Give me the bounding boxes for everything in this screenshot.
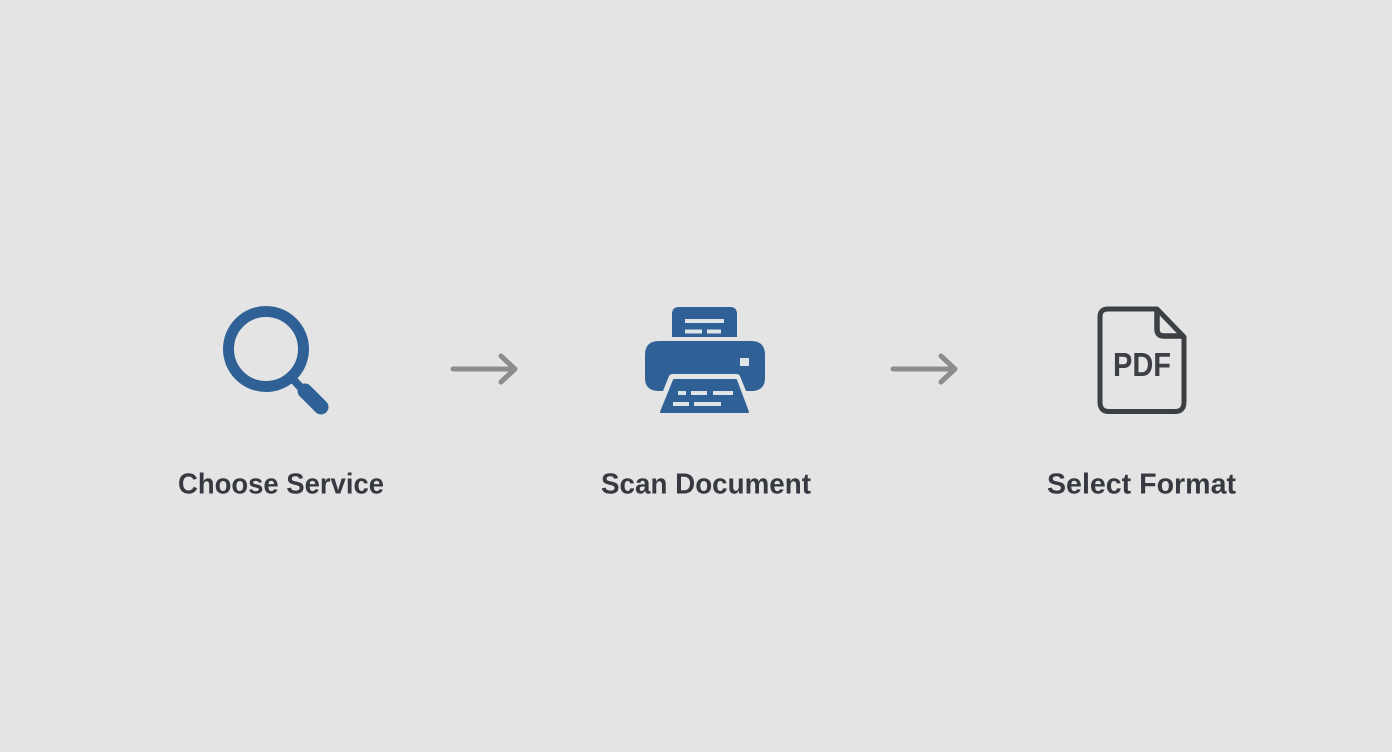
label: select format: Select Format xyxy=(1047,468,1236,500)
icon: pdf document: PDF xyxy=(1113,347,1171,384)
step 1: choose service xyxy=(178,312,384,500)
step 2: scan document xyxy=(601,307,811,500)
label: scan document: Scan Document xyxy=(601,468,811,500)
arrow: step 2 to step 3 xyxy=(893,356,955,382)
icon: printer xyxy=(645,307,765,412)
step 3: select format xyxy=(1047,309,1236,500)
icon: magnifying glass xyxy=(228,312,321,407)
icon: pdf document xyxy=(1100,309,1184,412)
arrow: step 1 to step 2 xyxy=(453,356,515,382)
label: choose service: Choose Service xyxy=(178,468,384,500)
